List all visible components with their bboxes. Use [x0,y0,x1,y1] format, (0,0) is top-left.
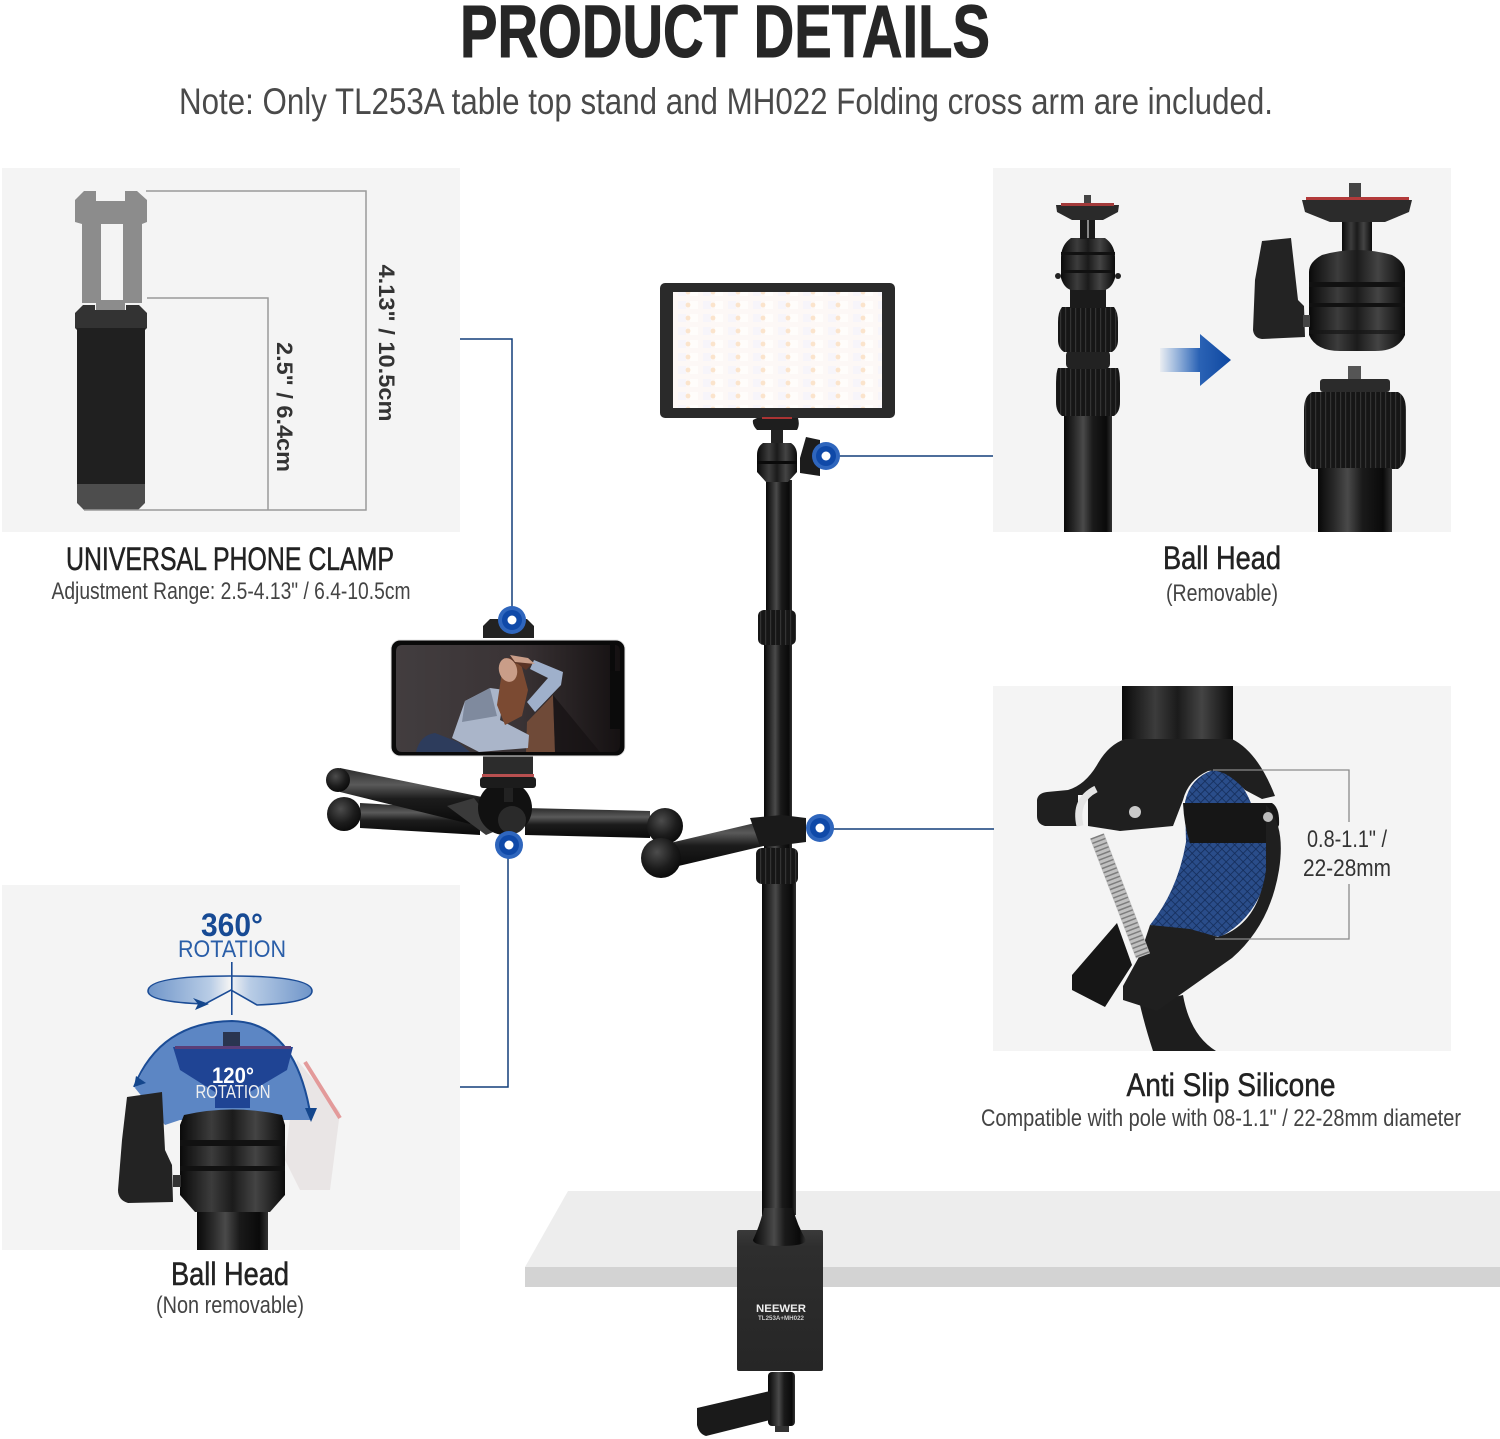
icon: assembled ball head pole [1055,195,1121,532]
stand: main pole and clamp [697,480,823,1436]
heading: ball head non removable: Ball Head [171,1256,289,1292]
arm ball socket [478,781,532,835]
icon: 360 rotation disc [148,962,312,1015]
dimension text metric: 22-28mm [1303,855,1391,882]
pole collar [750,815,806,846]
connector lines [460,339,994,1087]
model text: TL253A+MH022 [758,1316,805,1322]
knob lower [756,848,798,884]
phone mount head [483,756,533,776]
subtitle note: Note: Only TL253A table top stand and MH022 Folding cross arm are included. [179,81,1273,122]
far arm segment [360,803,480,835]
clamp flare [753,1208,806,1246]
dimension lines [1213,770,1349,939]
panel: removable ball head [993,168,1451,532]
dimension lines [84,191,366,510]
upper folded arm [340,768,482,824]
arrow: separates into [1160,334,1231,386]
heading: anti slip silicone: Anti Slip Silicone [1126,1067,1336,1103]
panel: non removable ball head [2,885,460,1250]
caption: adjustment range: Adjustment Range: 2.5-4.13" / 6.4-10.5cm [52,578,410,605]
icon: pole in clamp [1122,686,1233,740]
table top surface [525,1191,1500,1287]
label: rotation small: ROTATION [196,1082,270,1102]
LED panel light [660,283,895,482]
cross arm [326,756,806,878]
dimension: inner height: 2.5" / 6.4cm [272,342,297,472]
knob upper [758,610,796,645]
hinge plate [447,798,498,835]
cross arm to pole [670,818,776,868]
icon: phone clamp body [75,305,147,510]
icon: blue marker clamp [806,814,834,842]
dimension: outer height: 4.13" / 10.5cm [374,264,399,422]
icon: ball head with tilt arc [118,1021,340,1250]
label: 120 rotation: 120° [212,1063,254,1088]
icon: detached ball head [1253,183,1412,351]
icon: phone clamp upper slider [75,191,147,310]
caption: removable: (Removable) [1166,580,1278,607]
icon: pole top with screw [1304,366,1406,532]
label: rotation: ROTATION [178,936,286,963]
brand text: NEEWER [756,1303,806,1315]
panel: phone clamp [2,168,460,532]
icon: blue marker phone clamp [498,606,526,634]
pole [766,480,792,615]
icon: blue marker arm ball head [495,831,523,859]
icon: clamp body [1037,739,1281,1051]
icon: blue marker ball head [812,442,840,470]
mount base [753,418,799,430]
dimension text: 0.8-1.1" / [1307,826,1387,853]
caption: non removable: (Non removable) [156,1292,304,1319]
clamp screw [768,1372,795,1426]
clamp block [737,1230,823,1371]
right arm segment [525,808,650,838]
heading: universal phone clamp: UNIVERSAL PHONE CLAMP [66,541,394,577]
phone with clamp [391,619,625,756]
label: 360 rotation: 360° [201,907,263,943]
heading: ball head removable: Ball Head [1163,540,1281,576]
panel: anti slip silicone clamp [993,686,1451,1051]
